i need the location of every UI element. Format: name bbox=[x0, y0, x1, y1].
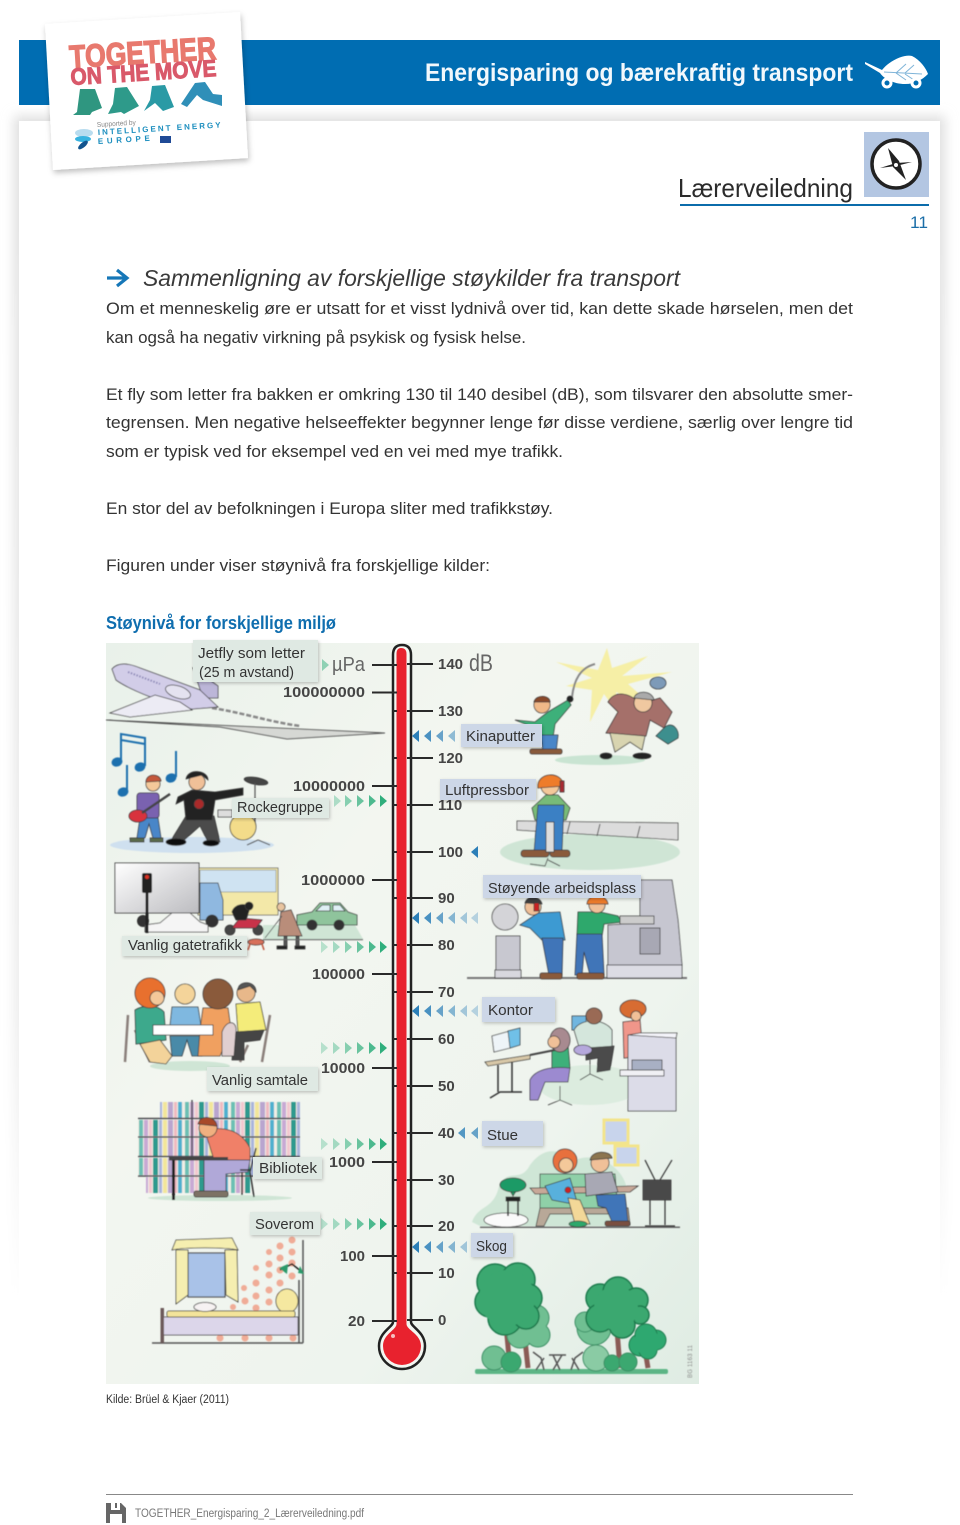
singer bbox=[166, 772, 243, 846]
text block: Europe: En stor del av befolkningen i Europa sliter med trafikkstøy. bbox=[106, 499, 553, 518]
scale: decibel: dB bbox=[469, 650, 493, 677]
scale: decibel: 30 bbox=[438, 1172, 455, 1189]
illustration: jet plane bbox=[106, 664, 385, 739]
scale: micropascal: 1000000 bbox=[301, 872, 365, 889]
scale: decibel: 130 bbox=[438, 703, 463, 720]
figure heading: Støynivå for forskjellige miljø bbox=[106, 613, 336, 633]
wallpaper flowers bbox=[216, 1236, 296, 1342]
music notes bbox=[111, 734, 177, 797]
illustration: noisy workplace bbox=[467, 880, 687, 979]
text block: intro bbox=[106, 299, 853, 347]
scale: decibel bbox=[393, 650, 493, 1329]
illustration: people talking bbox=[125, 978, 270, 1071]
label: Soverom bbox=[250, 1212, 320, 1235]
chart background bbox=[106, 643, 699, 1384]
logo card: Together on the move bbox=[45, 12, 248, 170]
logo supported by bbox=[75, 120, 222, 151]
label: Bibliotek: Bibliotek bbox=[259, 1160, 318, 1177]
garden table and chairs bbox=[533, 1352, 583, 1370]
label: Jetfly: (25 m avstand) bbox=[199, 664, 294, 681]
big tree left bbox=[475, 1263, 542, 1335]
illustration: forest: BG 1163 11 bbox=[688, 1344, 694, 1378]
scale: micropascal bbox=[283, 654, 397, 1330]
illustration: library bbox=[138, 1100, 300, 1201]
section label: Lærerveiledning bbox=[678, 173, 853, 203]
scale: decibel: 110 bbox=[438, 797, 462, 814]
icon: title arrow bbox=[107, 270, 127, 286]
scale: decibel: 80 bbox=[438, 937, 455, 954]
title: Sammenligning av forskjellige støykilder fra transport bbox=[143, 265, 682, 291]
label: Luftpressbor: Luftpressbor bbox=[445, 782, 529, 799]
illustration: office bbox=[485, 1000, 677, 1111]
illustration: bedroom bbox=[152, 1236, 304, 1343]
scale: micropascal: 1000 bbox=[329, 1154, 365, 1171]
icon: leaf on wheels bbox=[865, 56, 928, 87]
scale: decibel: 100 bbox=[438, 844, 463, 861]
footer bbox=[106, 1494, 853, 1523]
light tree right bbox=[575, 1311, 611, 1345]
guitarist bbox=[129, 775, 170, 842]
text block: figure intro: Figuren under viser støynivå fra forskjellige kilder: bbox=[106, 556, 490, 575]
footer: TOGETHER_Energisparing_2_Lærerveiledning.pdf bbox=[135, 1508, 365, 1520]
label: Jetfly bbox=[193, 640, 318, 682]
illustration: living room bbox=[472, 1120, 680, 1228]
text block: intro: kan også ha negativ virkning på psykisk og fysisk helse. bbox=[106, 328, 526, 347]
scale: decibel: 60 bbox=[438, 1031, 455, 1048]
label: Jetfly: Jetfly som letter bbox=[198, 645, 305, 662]
arrows: green pressure markers bbox=[321, 659, 387, 1230]
logo title: ON THE MOVE bbox=[70, 55, 217, 90]
label: Vanlig gatetrafikk: Vanlig gatetrafikk bbox=[128, 937, 242, 954]
scale: micropascal: 10000 bbox=[321, 1060, 365, 1077]
chart: noise levels bbox=[106, 640, 699, 1384]
header bar bbox=[19, 40, 940, 105]
light tree left bbox=[507, 1305, 550, 1348]
label: Vanlig samtale: Vanlig samtale bbox=[212, 1072, 308, 1089]
scale: micropascal: 10000000 bbox=[293, 778, 365, 795]
label: Kinaputter bbox=[461, 724, 542, 747]
label: Rockegruppe: Rockegruppe bbox=[237, 799, 323, 816]
logo supported by: INTELLIGENT ENERGY bbox=[98, 120, 222, 137]
label: Bibliotek bbox=[253, 1157, 322, 1179]
illustration: rock band bbox=[110, 734, 274, 853]
pedestrian with dog bbox=[248, 903, 305, 950]
scale: decibel: 140 bbox=[438, 656, 463, 673]
label: Kontor bbox=[482, 997, 555, 1022]
scale: micropascal: 20 bbox=[348, 1313, 365, 1330]
source note: Kilde: Brüel & Kjaer (2011) bbox=[106, 1394, 229, 1406]
scale: micropascal: 100000000 bbox=[283, 684, 365, 701]
illustration: firework scene bbox=[515, 648, 678, 765]
illustration: street traffic bbox=[115, 863, 363, 950]
bushes bbox=[482, 1345, 637, 1372]
label: Kinaputter: Kinaputter bbox=[466, 728, 535, 745]
logo supported by: EUROPE bbox=[98, 134, 151, 146]
illustration: forest bbox=[475, 1263, 694, 1378]
scale: decibel: 90 bbox=[438, 890, 455, 907]
scale: decibel: 10 bbox=[438, 1265, 455, 1282]
icon: compass bbox=[864, 132, 929, 197]
text block: decibel bbox=[106, 385, 853, 461]
label: Kontor: Kontor bbox=[488, 1002, 533, 1019]
scale: micropascal: 100 bbox=[340, 1248, 365, 1265]
label: Vanlig samtale bbox=[207, 1067, 318, 1091]
drum kit bbox=[218, 775, 270, 845]
scale: decibel: 120 bbox=[438, 750, 463, 767]
text block: decibel: som er typisk ved for eksempel ved en vei med mye trafikk. bbox=[106, 442, 563, 461]
label: Skog bbox=[471, 1233, 513, 1257]
text block: decibel: Et fly som letter fra bakken er omkring 130 til 140 desibel (dB), som tilsvarer den absolutte smer- bbox=[106, 385, 853, 404]
scale: decibel: 40 bbox=[438, 1125, 455, 1142]
motorcycle bbox=[225, 902, 263, 935]
text block: intro: Om et menneskelig øre er utsatt for et visst lydnivå over tid, kan dette skade hørselen, men det bbox=[106, 299, 853, 318]
scale: micropascal: µPa bbox=[332, 654, 366, 676]
small tree right bbox=[629, 1324, 666, 1359]
label: Stue: Stue bbox=[487, 1127, 518, 1144]
icon: floppy disk bbox=[106, 1503, 126, 1523]
thermometer bbox=[379, 645, 425, 1369]
header bar: Energisparing og bærekraftig transport bbox=[425, 59, 854, 87]
scale: decibel: 70 bbox=[438, 984, 455, 1001]
logo title bbox=[68, 30, 217, 90]
arrows: blue decibel markers bbox=[412, 730, 478, 1253]
scale: decibel: 0 bbox=[438, 1312, 446, 1329]
scale: decibel: 50 bbox=[438, 1078, 455, 1095]
logo title: TOGETHER bbox=[68, 30, 217, 75]
label: Støyende arbeidsplass: Støyende arbeidsplass bbox=[488, 880, 636, 897]
label: Stue bbox=[482, 1121, 543, 1146]
label: Skog: Skog bbox=[476, 1238, 507, 1255]
label: Soverom: Soverom bbox=[255, 1216, 314, 1233]
page number: 11 bbox=[910, 213, 928, 232]
logo supported by: Supported by bbox=[97, 120, 137, 129]
illustration: jackhammer worker bbox=[500, 775, 680, 870]
green car bbox=[297, 903, 357, 930]
text block: decibel: tegrensen. Men negative helseeffekter begynner lenge før disse verdiene, særlig over lengre tid bbox=[106, 413, 853, 432]
tree right bbox=[586, 1277, 649, 1338]
logo legs bbox=[73, 82, 222, 115]
scale: decibel: 20 bbox=[438, 1218, 455, 1235]
scale: micropascal: 100000 bbox=[312, 966, 365, 983]
